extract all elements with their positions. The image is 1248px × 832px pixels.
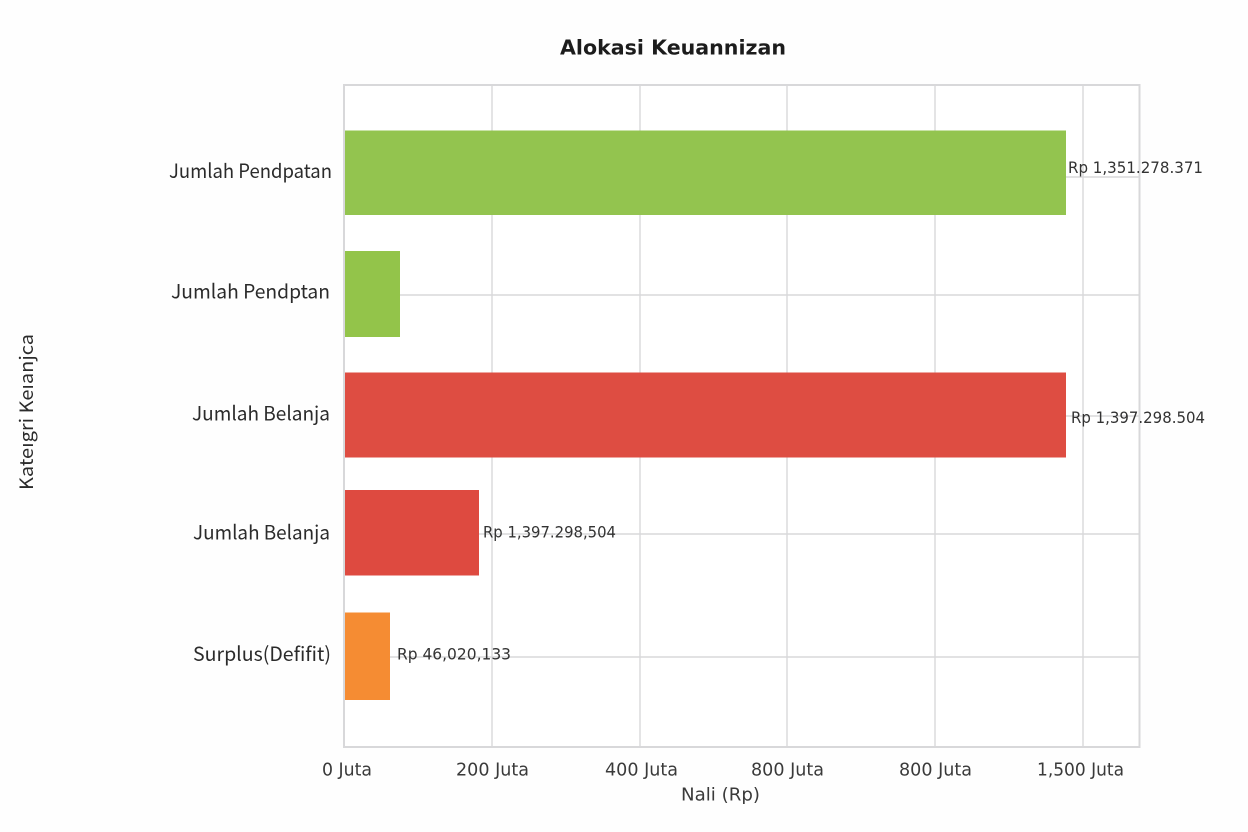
value: Jumlah Belanja 1: Rp 1,397.298.504: [1071, 408, 1205, 427]
y axis title: Kateıgri Keıanjca: [13, 334, 39, 490]
plot area with grid: [344, 85, 1140, 747]
category: Jumlah Belanja 1: Jumlah Belanja: [192, 398, 330, 426]
value: Jumlah Pendpatan: Rp 1,351.278.371: [1068, 158, 1203, 177]
x axis tick labels: [322, 760, 1124, 780]
tick: 1,500 Juta: 1,500 Juta: [1037, 760, 1124, 780]
x axis title: Nali (Rp): [681, 784, 760, 806]
category labels: [169, 155, 332, 667]
bars: [345, 130, 1066, 700]
bar: Jumlah Pendptan: [345, 251, 400, 337]
bar: Surplus(Defifit): [345, 612, 390, 700]
value labels: [397, 158, 1205, 664]
value: Jumlah Belanja 2: Rp 1,397.298,504: [483, 522, 616, 542]
tick: 0 Juta: 0 Juta: [322, 760, 372, 780]
tick: 800 Juta: 800 Juta: [751, 760, 824, 780]
title: Alokasi Keuannizan: [560, 36, 786, 60]
category: Jumlah Pendpatan: Jumlah Pendpatan: [169, 155, 332, 184]
value: Surplus(Defifit): Rp 46,020,133: [397, 644, 511, 664]
tick: 800 Juta: 800 Juta: [899, 760, 972, 780]
category: Jumlah Belanja 2: Jumlah Belanja: [193, 516, 330, 546]
category: Surplus(Defifit): Surplus(Defifit): [193, 638, 331, 667]
tick: 400 Juta: 400 Juta: [605, 760, 678, 780]
tick: 200 Juta: 200 Juta: [456, 760, 529, 780]
category: Jumlah Pendptan: Jumlah Pendptan: [171, 276, 330, 304]
bar: Jumlah Belanja 1: [345, 372, 1066, 458]
bar: Jumlah Belanja 2: [345, 490, 479, 576]
bar: Jumlah Pendpatan: [345, 130, 1066, 215]
